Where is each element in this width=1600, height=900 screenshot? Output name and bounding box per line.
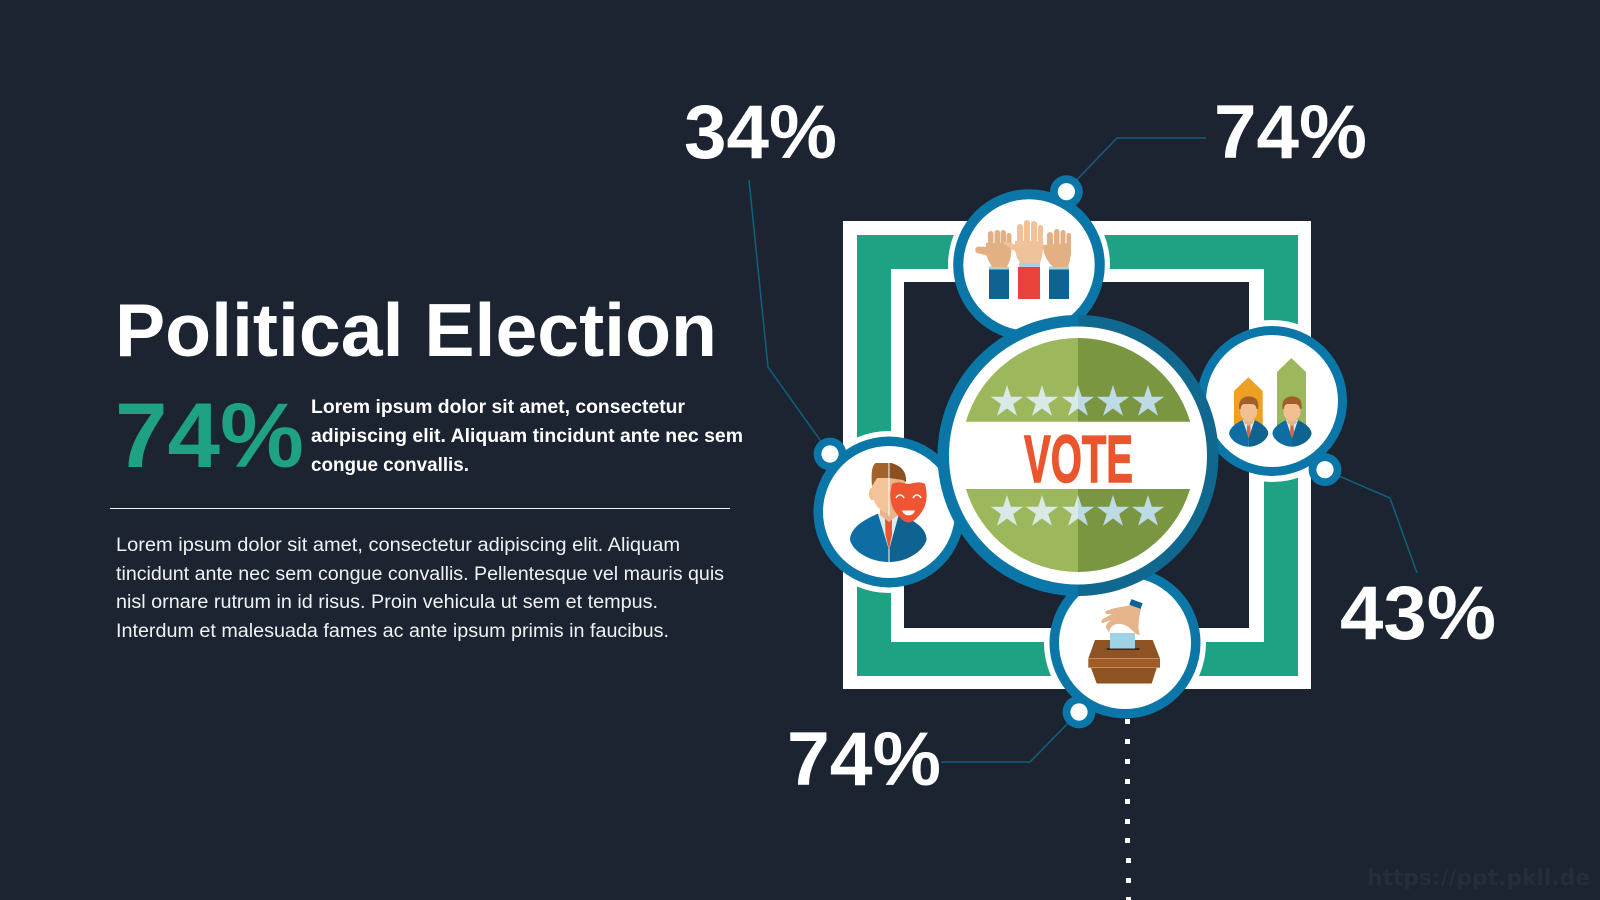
connector dot: top — [1050, 175, 1083, 208]
percentage label: top right 74%: 74% — [1214, 90, 1367, 175]
bold summary text: Lorem ipsum dolor sit amet, consectetur — [311, 397, 686, 418]
body paragraph — [116, 535, 724, 642]
square frame — [843, 221, 1311, 689]
red mask — [890, 482, 927, 522]
body paragraph: tincidunt ante nec sem congue convallis. Pellentesque vel mauris quis — [116, 564, 724, 585]
central vote badge — [938, 315, 1218, 596]
percentage label: 34%: 34% — [684, 90, 837, 175]
bold summary text: adipiscing elit. Aliquam tincidunt ante nec sem — [311, 426, 743, 447]
hand — [1102, 599, 1143, 635]
percentage label: 43%: 43% — [1340, 571, 1496, 656]
center raised hand — [1003, 220, 1044, 299]
green top segment — [966, 338, 1190, 422]
icon: raised hands — [953, 189, 1105, 341]
title: Political Election — [115, 288, 717, 372]
connector dot: bottom — [1063, 696, 1095, 728]
green arrow bar — [1277, 358, 1306, 430]
bold summary text: congue convallis. — [311, 455, 469, 476]
bold summary text — [311, 397, 743, 476]
connector dot: right — [1309, 453, 1341, 486]
candidate two — [1272, 396, 1312, 447]
icon: candidates with arrows — [1197, 326, 1347, 476]
icon: man with mask — [814, 436, 964, 588]
right raised hand — [1043, 229, 1071, 299]
top stars — [991, 385, 1164, 416]
head — [869, 463, 906, 522]
watermark: https://ppt.pkll.de — [1367, 866, 1590, 891]
connector lines — [749, 138, 1417, 762]
green bottom segment — [966, 489, 1190, 572]
candidate one — [1229, 396, 1268, 447]
body paragraph: Interdum et malesuada fames ac ante ipsum primis in faucibus. — [116, 621, 669, 642]
orange arrow bar — [1234, 377, 1263, 430]
bottom stars — [991, 495, 1164, 526]
connector dot: left — [814, 438, 846, 470]
suit — [850, 514, 927, 562]
left raised hand — [975, 230, 1012, 299]
vote text: VOTE — [1024, 422, 1133, 497]
ballot paper — [1110, 633, 1135, 650]
percentage label: bottom 74%: 74% — [787, 717, 941, 802]
body paragraph: Lorem ipsum dolor sit amet, consectetur adipiscing elit. Aliquam — [116, 535, 680, 556]
body paragraph: nisl ornare rutrum in id risus. Proin vehicula ut sem et tempus. — [116, 592, 658, 613]
big green statistic: 74% — [115, 385, 304, 487]
box — [1088, 640, 1160, 684]
dotted vertical line — [1125, 719, 1131, 900]
icon: ballot box — [1050, 568, 1200, 718]
